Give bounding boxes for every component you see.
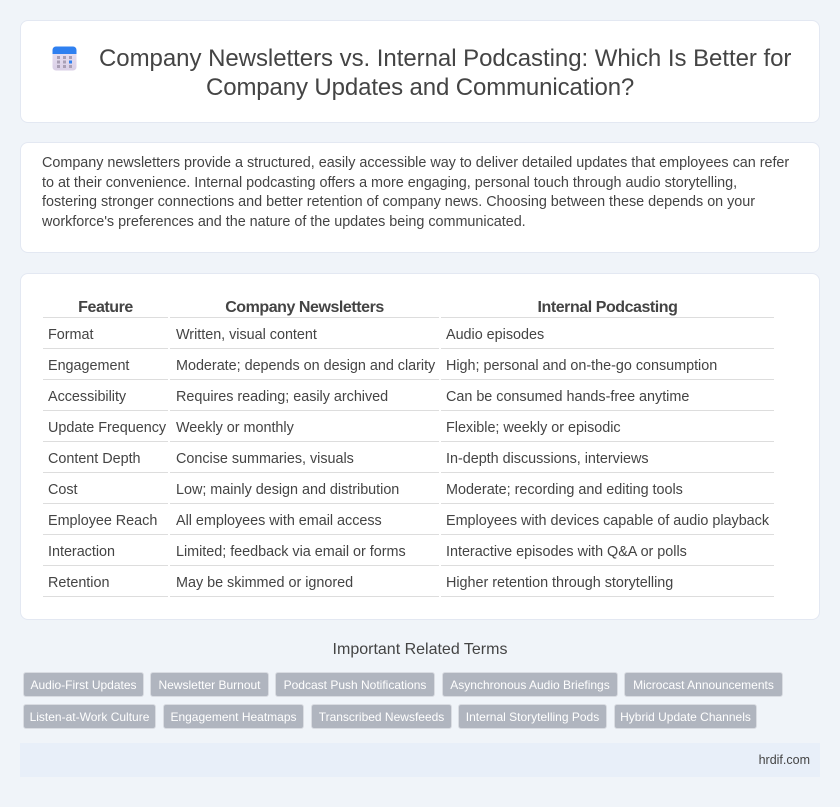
tag [23,672,144,697]
table card [20,273,820,620]
row: interaction: Interactive episodes with Q&A or polls [446,544,687,560]
row: employee reach: All employees with email access [176,513,382,529]
tag: Hybrid Update Channels [620,710,751,724]
row: format: Audio episodes [446,327,544,343]
title: Company Newsletters vs. Internal Podcasting: Which Is Better for [99,45,791,72]
row: update frequency: Flexible; weekly or episodic [446,420,621,436]
tag: Transcribed Newsfeeds [319,710,444,724]
row: engagement: Engagement [48,358,129,374]
row: update frequency [48,420,621,436]
row: cost: Moderate; recording and editing tools [446,482,683,498]
row: accessibility [48,389,689,405]
tag: Microcast Announcements [633,678,774,692]
row: employee reach [48,513,769,529]
intro text: to at their convenience. Internal podcasting offers a more engaging, personal touch through audio storytelling, [42,175,737,191]
row: content depth: Concise summaries, visuals [176,451,354,467]
row: interaction: Limited; feedback via email or forms [176,544,406,560]
tag [150,672,269,697]
row: engagement [48,358,717,374]
tag: Newsletter Burnout [158,678,261,692]
footer bar [20,743,820,777]
row: cost: Low; mainly design and distribution [176,482,399,498]
tag: Audio-First Updates [30,678,137,692]
row: accessibility: Accessibility [48,389,126,405]
tag [442,672,618,697]
tag: Internal Storytelling Pods [466,710,599,724]
tag: Asynchronous Audio Briefings [450,678,610,692]
tag: Listen-at-Work Culture [30,710,149,724]
table header [78,299,677,316]
title [99,45,791,101]
table header: Internal Podcasting [538,299,677,316]
row: retention: Retention [48,575,109,591]
row: format [48,327,544,343]
row: employee reach: Employees with devices capable of audio playback [446,513,769,529]
row: interaction [48,544,687,560]
tag [311,704,452,729]
row: format: Written, visual content [176,327,317,343]
row: engagement: Moderate; depends on design and clarity [176,358,435,374]
footer source: hrdif.com [759,753,810,767]
row: format: Format [48,327,93,343]
row: retention: Higher retention through storytelling [446,575,673,591]
table header: Feature [78,299,133,316]
intro card [20,142,820,253]
icon: calendar [52,46,76,70]
row: retention: May be skimmed or ignored [176,575,353,591]
header card [20,20,820,123]
related terms tags [23,672,783,729]
row: employee reach: Employee Reach [48,513,157,529]
row: content depth: In-depth discussions, interviews [446,451,649,467]
tag [624,672,783,697]
row: retention [48,575,673,591]
row: content depth: Content Depth [48,451,141,467]
tag: Podcast Push Notifications [284,678,426,692]
row: cost [48,482,683,498]
row: engagement: High; personal and on-the-go consumption [446,358,717,374]
intro text: fostering stronger connections and better retention of company news. Choosing between these depends on your [42,194,755,210]
related terms heading: Important Related Terms [333,641,507,658]
tag [23,704,156,729]
row: content depth [48,451,649,467]
row: cost: Cost [48,482,78,498]
intro text [42,155,789,230]
title: Company Updates and Communication? [206,74,634,101]
tag [614,704,757,729]
intro text: Company newsletters provide a structured, easily accessible way to deliver detailed updates that employees can refer [42,155,789,171]
comparison table [43,299,774,597]
tag [163,704,304,729]
table header: Company Newsletters [225,299,384,316]
tag [275,672,435,697]
row: interaction: Interaction [48,544,115,560]
intro text: workforce's preferences and the nature of the updates being communicated. [42,214,526,230]
tag: Engagement Heatmaps [170,710,297,724]
row: update frequency: Weekly or monthly [176,420,294,436]
tag [458,704,607,729]
row: accessibility: Requires reading; easily archived [176,389,388,405]
row: accessibility: Can be consumed hands-free anytime [446,389,689,405]
row: update frequency: Update Frequency [48,420,166,436]
